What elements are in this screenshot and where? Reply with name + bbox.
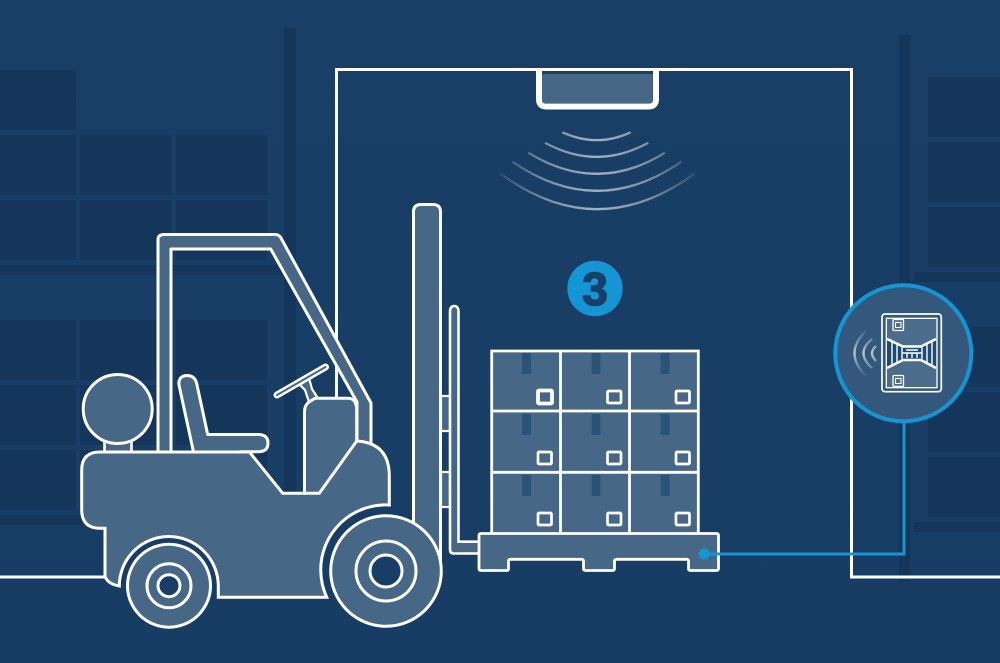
step number badge: 3 (582, 263, 608, 315)
steering wheel (277, 367, 326, 395)
gas tank (83, 374, 152, 444)
pallet (479, 534, 718, 570)
right warehouse shelving (899, 35, 1000, 582)
rear wheel (128, 544, 210, 627)
detail callout: RFID tag (835, 285, 971, 421)
ceiling RFID reader (539, 70, 656, 106)
box faces (492, 351, 698, 533)
pallet tag marker (699, 548, 710, 560)
box outlines (492, 351, 698, 533)
left warehouse shelving (0, 28, 296, 580)
forklift mast (414, 204, 440, 560)
RFID tag (882, 314, 941, 392)
box labels (538, 390, 690, 525)
forklift (82, 234, 441, 627)
seat (179, 376, 268, 455)
overhead guard (158, 234, 371, 456)
tag signal waves (854, 331, 876, 376)
front wheel (331, 516, 441, 626)
steering column (298, 378, 319, 402)
mast cross bars (441, 396, 450, 507)
box tapes (522, 353, 670, 496)
step number badge (567, 261, 623, 316)
doorway frame and floor line (0, 70, 1000, 577)
gas tank neck (104, 438, 132, 454)
reader signal waves (500, 132, 695, 209)
control console (304, 398, 357, 495)
stacked boxes (492, 351, 698, 533)
connector line from pallet tag to detail (704, 421, 904, 554)
chassis body (82, 441, 389, 597)
callout circle (835, 285, 971, 421)
fork carriage (450, 306, 480, 554)
